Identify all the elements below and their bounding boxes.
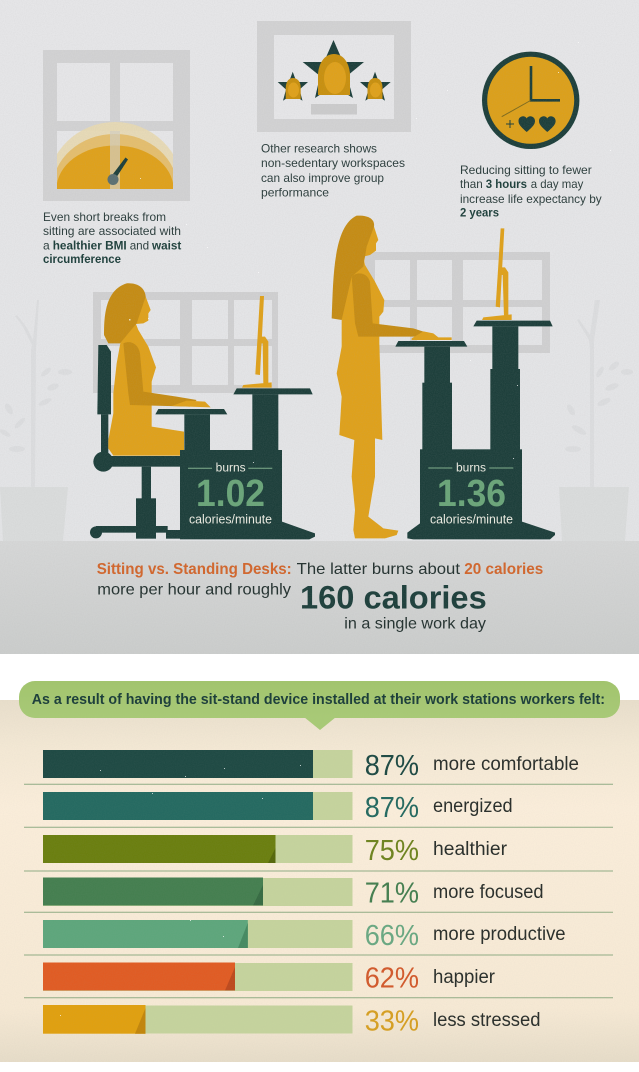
summary text xyxy=(97,561,543,632)
row: more comfortable 87%: more comfortable xyxy=(433,754,579,775)
row: more focused 71%: 71% xyxy=(365,878,419,910)
label: sitting burn rate: burns xyxy=(216,462,246,474)
monitor xyxy=(242,296,272,388)
seated woman xyxy=(104,283,211,456)
sitting desk xyxy=(155,388,315,539)
text: life expectancy: than xyxy=(460,177,483,191)
text: life expectancy: 2 years xyxy=(460,206,499,220)
star: right xyxy=(360,72,391,101)
summary text: The latter burns about xyxy=(297,561,461,578)
row: more productive 66%: 66% xyxy=(365,920,419,952)
text: life expectancy: 3 hours xyxy=(486,177,527,191)
row: happier 62%: 62% xyxy=(365,962,419,994)
name plate xyxy=(311,104,357,114)
standing figure with desk xyxy=(332,216,555,539)
icon: window with gauge xyxy=(43,50,190,201)
text: life expectancy: increase life expectancy by xyxy=(460,192,602,206)
text: group performance: performance xyxy=(261,186,329,200)
row: happier 62% xyxy=(43,962,496,994)
monitor xyxy=(482,228,512,320)
summary text: more per hour and roughly xyxy=(97,581,291,598)
text: life expectancy: Reducing sitting to fewer xyxy=(460,163,592,177)
row: more focused 71%: more focused xyxy=(433,882,544,903)
chair xyxy=(90,345,183,539)
text: group performance: non-sedentary workspaces xyxy=(261,156,405,170)
summary text: Sitting vs. Standing Desks: xyxy=(97,561,292,578)
row: more productive 66%: more productive xyxy=(433,924,566,945)
row: healthier 75% xyxy=(43,835,508,867)
text: life expectancy xyxy=(460,163,602,220)
plant right xyxy=(565,300,633,487)
text: short breaks: waist xyxy=(151,238,181,252)
row: less stressed 33% xyxy=(43,1005,540,1038)
text: life expectancy: a day may xyxy=(531,177,583,191)
row: more productive 66% xyxy=(43,920,566,952)
text: group performance: Other research shows xyxy=(261,142,377,156)
star: centre xyxy=(303,40,364,98)
row dividers xyxy=(24,784,613,998)
label: standing burn rate: calories/minute xyxy=(430,512,513,526)
row: happier 62%: happier xyxy=(433,967,496,988)
icon: window with stars xyxy=(257,21,411,132)
row: more focused 71% xyxy=(43,878,544,910)
label: standing burn rate: burns xyxy=(456,463,486,475)
label: sitting burn rate xyxy=(188,462,272,526)
text: group performance xyxy=(261,142,405,200)
label: standing burn rate: 1.36 xyxy=(437,473,506,515)
paper grain texture, bottom xyxy=(59,762,271,1034)
plant pot left xyxy=(0,487,68,541)
row: energized 87% xyxy=(43,792,513,824)
window behind standing figure xyxy=(365,252,550,353)
text: short breaks: and xyxy=(130,238,149,252)
row: healthier 75%: 75% xyxy=(365,835,419,867)
label: sitting burn rate: 1.02 xyxy=(196,473,265,515)
heading speech bubble xyxy=(19,681,620,730)
row: less stressed 33%: less stressed xyxy=(433,1010,540,1031)
standing desk xyxy=(395,321,555,539)
label: standing burn rate xyxy=(428,463,513,526)
top panel background xyxy=(0,0,639,654)
summary text: 160 calories xyxy=(300,579,487,615)
row: healthier 75%: healthier xyxy=(433,839,508,860)
row: less stressed 33%: 33% xyxy=(365,1006,419,1038)
summary text: 20 calories xyxy=(464,561,543,578)
window behind sitting figure xyxy=(93,292,278,393)
text: short breaks: circumference xyxy=(43,252,121,266)
text: short breaks: healthier BMI xyxy=(53,238,127,252)
text: short breaks: a xyxy=(43,238,50,252)
dust speckles xyxy=(60,42,611,1016)
icon: clock with hearts xyxy=(482,52,579,149)
paper grain texture, top xyxy=(0,0,639,654)
star: left xyxy=(278,72,308,101)
text: short breaks: sitting are associated with xyxy=(43,224,181,238)
label: sitting burn rate: calories/minute xyxy=(189,512,272,526)
row: energized 87%: 87% xyxy=(365,792,419,824)
row: more comfortable 87% xyxy=(43,750,579,782)
summary text: in a single work day xyxy=(344,615,486,632)
plant left xyxy=(0,300,72,487)
text: short breaks: Even short breaks from xyxy=(43,210,166,224)
heading speech bubble: As a result of having the sit-stand device installed at their work stations workers felt: xyxy=(32,692,605,708)
bottom panel background xyxy=(0,700,639,1062)
text: group performance: can also improve group xyxy=(261,171,384,185)
plant pot right xyxy=(559,487,629,541)
standing woman xyxy=(332,216,452,538)
sitting figure with chair and desk xyxy=(90,283,315,539)
row: more comfortable 87%: 87% xyxy=(365,750,419,782)
row: energized 87%: energized xyxy=(433,796,513,817)
text: short breaks xyxy=(43,210,181,266)
